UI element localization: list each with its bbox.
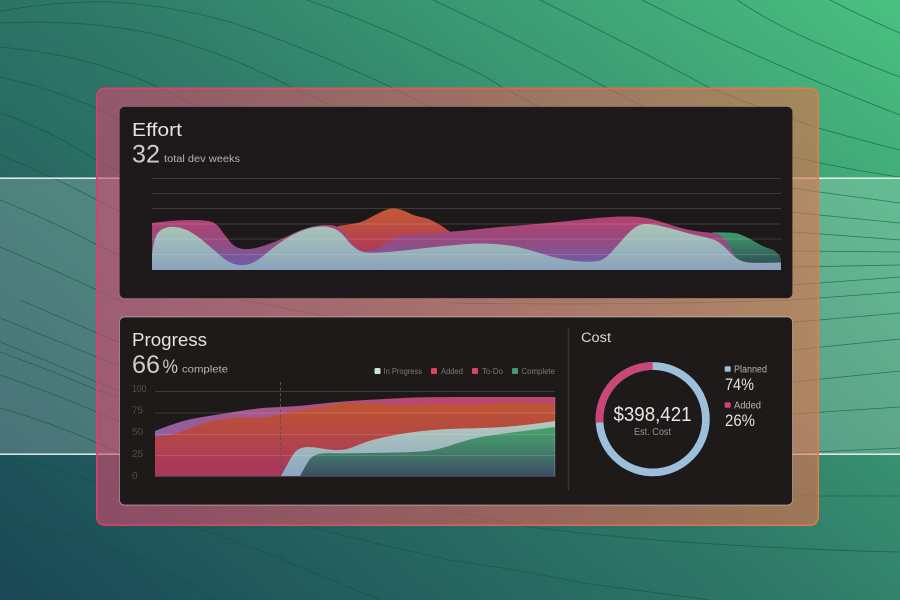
legend: progress: Complete	[522, 366, 555, 376]
y axis labels: 75	[132, 406, 144, 416]
legend: cost: Added	[734, 400, 761, 412]
heading: Effort: Effort	[132, 120, 182, 140]
legend: cost	[725, 364, 767, 430]
stat: 66% complete: complete	[182, 364, 228, 376]
stat: 66% complete: %	[162, 357, 178, 378]
legend: cost: 74%	[725, 375, 754, 394]
y axis labels	[132, 384, 147, 482]
stat: 32 total dev weeks	[132, 140, 240, 168]
y axis labels: 0	[132, 471, 138, 482]
panel: progress and cost	[120, 317, 792, 505]
donut center value: $398,421	[614, 404, 692, 426]
heading: Cost: Cost	[581, 330, 611, 345]
stat: 32 total dev weeks: 32	[132, 140, 160, 168]
heading: Progress: Progress	[132, 330, 207, 350]
y axis labels: 50	[132, 427, 144, 438]
stat: 66% complete	[132, 351, 228, 379]
stat: 66% complete: 66	[132, 351, 160, 379]
legend: progress: Added	[441, 366, 463, 376]
divider between progress and cost	[568, 328, 569, 490]
legend: cost: 26%	[725, 411, 755, 430]
area chart: effort	[152, 178, 781, 270]
legend: progress: To-Do	[482, 366, 503, 376]
legend: cost: Planned	[734, 364, 767, 376]
donut chart: cost	[599, 366, 706, 472]
donut center label: Est. Cost	[634, 427, 671, 438]
y axis labels: 100	[132, 384, 147, 395]
legend: progress	[374, 366, 555, 376]
y axis labels: 25	[132, 449, 144, 460]
frame: translucent pink-to-orange container	[97, 88, 818, 525]
legend: progress: In Progress	[384, 366, 422, 376]
panel: effort	[120, 107, 792, 298]
area chart: progress	[155, 382, 555, 476]
stat: 32 total dev weeks: total dev weeks	[164, 153, 240, 165]
